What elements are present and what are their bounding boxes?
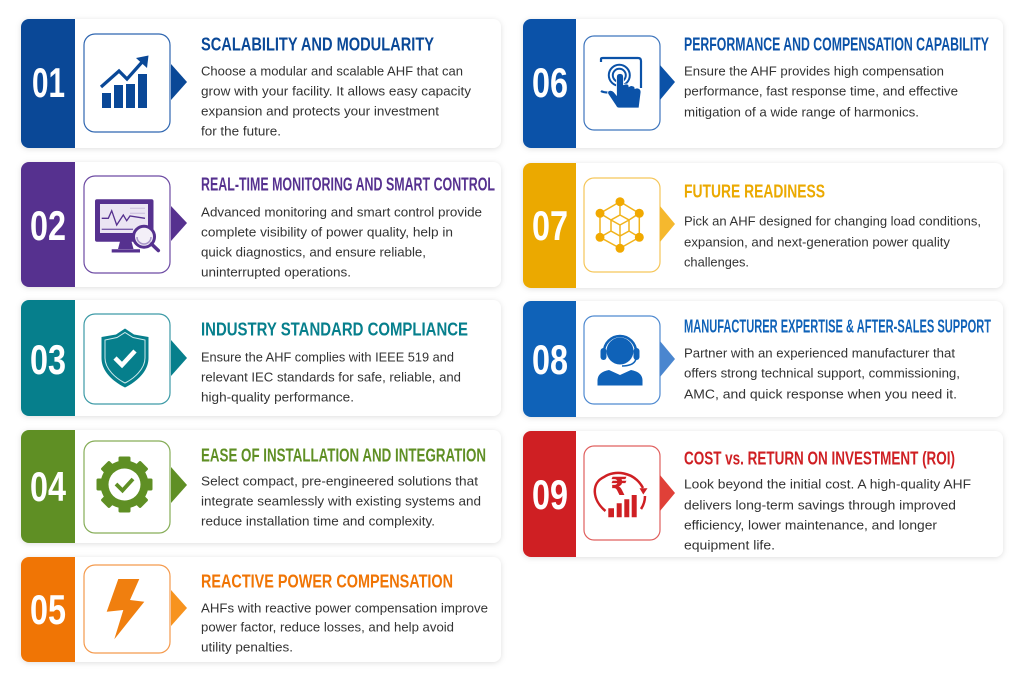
number badge 02 [21,162,75,287]
icon: headset support agent [584,316,660,404]
text block: high-quality performance. [201,390,354,404]
arrow [171,467,187,503]
text block [684,346,960,402]
text block: offers strong technical support, commissioning, [684,366,960,380]
text block: Choose a modular and scalable AHF that can [201,64,463,78]
text block [684,64,958,120]
icon: shield with check [84,314,170,404]
icon: touch hand [584,36,660,130]
text block [201,474,481,528]
number badge 02: 02 [30,202,66,249]
text block: AHFs with reactive power compensation improve [201,600,488,616]
icon: rising bar chart [84,34,170,132]
panel: 08 manufacturer expertise and after-sales support [523,301,1003,417]
number badge 04 [21,430,75,543]
icon: monitor with magnifier [84,176,170,273]
number badge 03: 03 [30,336,66,383]
panel: 02 real-time monitoring and smart control [21,162,501,287]
number badge 08: 08 [532,336,568,383]
panel: 04 ease of installation and integration [21,430,501,543]
text block [684,476,971,552]
text block: uninterrupted operations. [201,264,351,280]
arrow [171,64,187,100]
number badge 09 [523,431,576,557]
text block: equipment life. [684,538,775,552]
text block: power factor, reduce losses, and help avoid [201,620,454,634]
number badge 04: 04 [30,463,66,510]
number badge 07 [523,163,576,288]
text block: relevant IEC standards for safe, reliable, and [201,370,461,384]
heading: SCALABILITY AND MODULARITY [201,34,434,54]
text block: delivers long-term savings through improved [684,498,956,512]
text block [684,214,981,270]
heading: REAL-TIME MONITORING AND SMART CONTROL [201,174,495,194]
arrow [171,340,187,376]
text block: Ensure the AHF provides high compensation [684,64,944,78]
text block: complete visibility of power quality, help in [201,224,453,240]
arrow [660,475,675,511]
text block: performance, fast response time, and effective [684,84,958,98]
text block: utility penalties. [201,640,293,654]
text block: Pick an AHF designed for changing load conditions, [684,214,981,228]
heading: REACTIVE POWER COMPENSATION [201,572,453,592]
heading: INDUSTRY STANDARD COMPLIANCE [201,320,468,340]
number badge 01 [21,19,75,148]
text block: challenges. [684,254,749,270]
icon: rupee return cycle with bars: ₹ [610,472,628,501]
number badge 03 [21,300,75,416]
number badge 06 [523,19,576,148]
text block [201,600,488,654]
text block: Ensure the AHF complies with IEEE 519 and [201,350,454,364]
heading: FUTURE READINESS [684,182,825,202]
panel: 05 reactive power compensation [21,557,501,662]
number badge 05: 05 [30,586,66,633]
panel: 09 cost vs return on investment [523,431,1003,557]
text block: mitigation of a wide range of harmonics. [684,104,919,120]
icon: gear with check [84,441,170,533]
number badge 08 [523,301,576,417]
text block: expansion, and next-generation power quality [684,234,951,250]
icon: lightning bolt [84,565,170,653]
icon: rupee return cycle with bars [584,446,660,540]
icon: hexagonal network cube [584,178,660,272]
text block: expansion and protects your investment [201,104,439,118]
text block: Advanced monitoring and smart control provide [201,204,482,220]
number badge 09: 09 [532,471,568,518]
number badge 06: 06 [532,59,568,106]
panel: 01 scalability and modularity [21,19,501,148]
arrow [660,65,675,100]
panel: 06 performance and compensation capability [523,19,1003,148]
arrow [171,206,187,241]
panel: 03 industry standard compliance [21,300,501,416]
text block: quick diagnostics, and ensure reliable, [201,244,426,260]
number badge 07: 07 [532,202,568,249]
arrow [660,206,675,242]
text block [201,350,461,404]
text block: integrate seamlessly with existing systems and [201,494,481,508]
number badge 05 [21,557,75,662]
text block: efficiency, lower maintenance, and longer [684,518,938,532]
text block: for the future. [201,124,281,138]
text block: Partner with an experienced manufacturer that [684,346,955,360]
number badge 01: 01 [32,59,65,106]
arrow [171,590,187,626]
heading: EASE OF INSTALLATION AND INTEGRATION [201,446,486,466]
text block [201,204,482,280]
text block [201,64,472,138]
text block: AMC, and quick response when you need it. [684,386,957,402]
text block: Select compact, pre-engineered solutions that [201,474,478,488]
text block: Look beyond the initial cost. A high-quality AHF [684,476,971,492]
arrow [660,341,675,377]
text block: grow with your facility. It allows easy capacity [201,84,472,98]
panel: 07 future readiness [523,163,1003,288]
text block: reduce installation time and complexity. [201,514,435,528]
